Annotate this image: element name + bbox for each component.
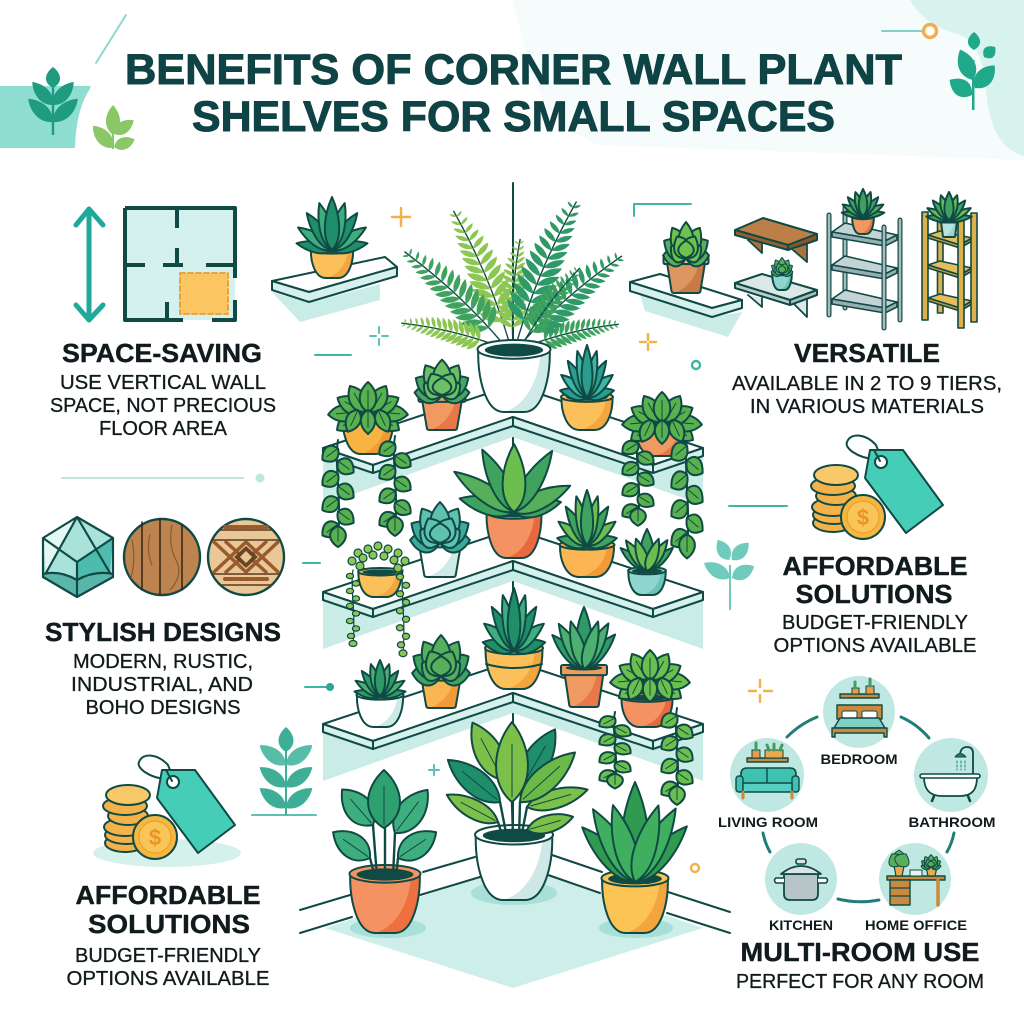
decorative line and ring top <box>96 15 936 63</box>
floor plant left: orange pot <box>326 770 443 933</box>
panel: versatile <box>634 189 1002 418</box>
shelf tier 2 <box>323 529 703 649</box>
icon: glass shelf with plant <box>735 258 817 317</box>
white pot <box>478 340 550 412</box>
text: stylish description: MODERN, RUSTIC, <box>73 651 253 673</box>
tier 1 plants <box>318 191 707 558</box>
panel: multi-room use <box>718 676 996 993</box>
text: budget right <box>774 612 976 657</box>
icon: left teal sprig <box>255 727 317 815</box>
icon: coins and price tag <box>103 756 235 859</box>
shadow under coins <box>93 839 241 867</box>
shelf tier 3 <box>323 661 703 781</box>
text: stylish description: INDUSTRIAL, AND <box>71 674 253 696</box>
title: BENEFITS OF CORNER WALL PLANT <box>125 46 902 94</box>
icon: kitchen pot <box>765 843 837 915</box>
icon: boho pattern <box>208 519 284 595</box>
divider with dot <box>62 474 264 482</box>
yellow pot with rosette <box>408 635 474 708</box>
text: living room: LIVING ROOM <box>718 814 818 830</box>
tier 3 plants <box>353 588 697 805</box>
text: budget right: OPTIONS AVAILABLE <box>774 635 976 657</box>
central corner wall line <box>512 183 514 860</box>
text: space-saving description: USE VERTICAL WALL <box>60 372 266 394</box>
icon: top-left light sprout <box>88 105 137 153</box>
icon: metal shelf unit <box>829 189 900 328</box>
heading: affordable right: AFFORDABLE <box>782 551 968 581</box>
room ring arcs <box>763 717 954 902</box>
heading: affordable solutions: SOLUTIONS <box>88 909 250 939</box>
text: stylish description <box>71 651 253 719</box>
text: home office: HOME OFFICE <box>865 917 967 933</box>
yellow striped pot with plant <box>481 588 547 689</box>
orange pot with arching plant <box>449 444 574 558</box>
icon: living room <box>730 738 804 812</box>
icon: bracket accent <box>634 204 691 216</box>
icon: home office <box>879 843 951 915</box>
icon: floor plan <box>125 208 235 320</box>
title <box>125 46 902 141</box>
white round pot with plant <box>353 660 407 727</box>
floor plant centre: white pot <box>440 716 590 900</box>
right trailing plant <box>618 392 707 558</box>
text: space-saving description: SPACE, NOT PRECIOUS <box>50 395 276 417</box>
heading: affordable solutions: AFFORDABLE <box>76 880 260 910</box>
icon: right teal sprout <box>701 537 757 610</box>
icon: glass gem <box>43 517 113 597</box>
icon: wood texture <box>124 519 200 595</box>
string of pearls plant <box>346 542 410 657</box>
right trailing plant tier 3 <box>595 650 697 805</box>
floating shelf top-right with plant <box>630 222 742 337</box>
panel: affordable solutions right <box>774 436 976 657</box>
icon: wood shelf <box>735 218 817 262</box>
text: bedroom: BEDROOM <box>820 751 898 767</box>
text: kitchen: KITCHEN <box>769 917 833 933</box>
heading: space-saving: SPACE-SAVING <box>62 338 262 368</box>
heading: multi-room use: MULTI-ROOM USE <box>740 937 980 967</box>
text: versatile description: IN VARIOUS MATERIALS <box>750 396 984 418</box>
small decorations <box>252 208 787 872</box>
text: space-saving description <box>50 372 276 440</box>
text: stylish description: BOHO DESIGNS <box>86 697 240 719</box>
icon: bamboo shelf unit <box>922 192 977 328</box>
icon: bedroom <box>823 676 895 748</box>
tier 2 plants <box>346 444 677 657</box>
floor <box>300 855 730 988</box>
floating shelf top-left with plant <box>272 197 397 322</box>
panel: space-saving <box>50 208 276 440</box>
text: budget description: OPTIONS AVAILABLE <box>66 968 270 990</box>
yellow round pot with green plant <box>556 490 618 577</box>
icon: vertical double arrow <box>76 209 103 320</box>
fern in white pot <box>401 191 625 359</box>
heading: versatile: VERSATILE <box>794 338 940 368</box>
text: budget description: BUDGET-FRIENDLY <box>75 945 261 967</box>
orange pot with tall plant <box>548 607 620 707</box>
icon: bathroom <box>914 738 988 812</box>
heading: affordable right <box>782 551 968 609</box>
text: versatile description: AVAILABLE IN 2 TO 9 TIERS, <box>732 373 1002 395</box>
floor plant right: yellow pot <box>575 782 694 933</box>
heading: affordable solutions <box>76 880 260 939</box>
title: SHELVES FOR SMALL SPACES <box>192 93 835 141</box>
text: multi-room description: PERFECT FOR ANY ROOM <box>736 971 984 993</box>
icon: top-left sprout <box>23 67 83 135</box>
text: budget description <box>66 945 270 990</box>
small teal pot with plant <box>617 529 677 595</box>
heading: stylish designs: STYLISH DESIGNS <box>45 617 281 647</box>
yellow pot with teal aloe <box>559 345 615 430</box>
icon: coins and tag right <box>811 436 943 539</box>
text: versatile description <box>732 373 1002 418</box>
text: space-saving description: FLOOR AREA <box>99 418 228 440</box>
text: budget right: BUDGET-FRIENDLY <box>782 612 968 634</box>
terracotta pot with succulent <box>411 360 473 430</box>
left trailing plant <box>318 382 415 547</box>
panel: affordable solutions left <box>66 756 270 990</box>
panel: stylish designs <box>43 517 284 719</box>
icon: top-right sprout <box>945 32 1001 110</box>
text: bathroom: BATHROOM <box>908 814 996 830</box>
white pot with teal succulent <box>406 502 474 577</box>
heading: affordable right: SOLUTIONS <box>796 579 952 609</box>
shelf tier 1 <box>323 385 703 505</box>
background shapes <box>0 0 1024 160</box>
